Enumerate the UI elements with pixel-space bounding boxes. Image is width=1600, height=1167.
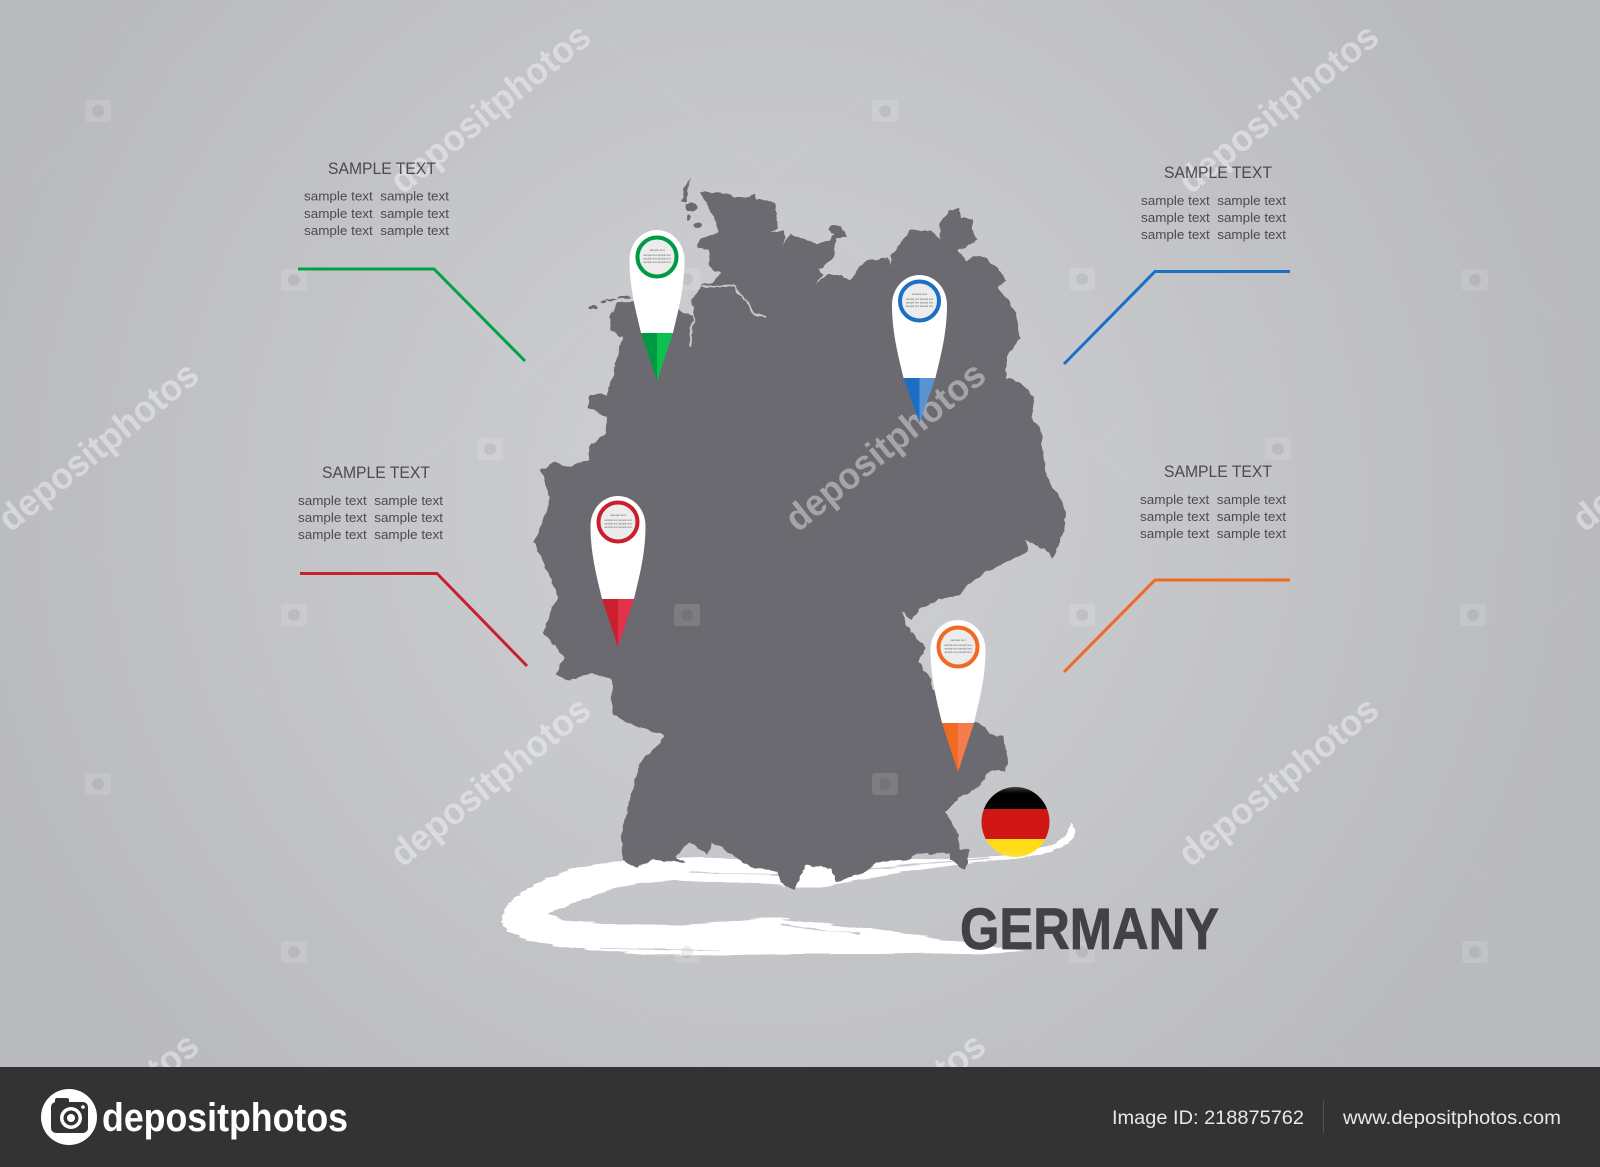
callout: top left (green): [304, 160, 449, 238]
callout: bottom right (orange): sample text sample text: [1140, 509, 1286, 524]
footer logo icon: [41, 1089, 97, 1145]
callout: bottom right (orange): sample text sample text: [1140, 526, 1286, 541]
leader line: orange: [1064, 580, 1290, 672]
footer bar: [0, 1067, 1600, 1167]
watermark text: depositphotos: [382, 688, 598, 874]
callout: top left (green): SAMPLE TEXT: [328, 160, 436, 178]
pin: blue: [892, 275, 947, 423]
callout: top left (green): sample text sample text: [304, 188, 449, 204]
callout: top left (green): sample text sample text: [304, 223, 449, 238]
pin: green: sample text sample text: [643, 260, 671, 264]
pin: blue: sample text sample text: [906, 300, 933, 304]
watermark text: depositphotos: [382, 15, 598, 201]
pin: blue: sample text sample text: [906, 304, 933, 308]
pin: orange: [930, 620, 986, 772]
watermark text: depositphotos: [1170, 15, 1386, 201]
pin: green: sample text: [649, 248, 665, 252]
pin: orange: sample text sample text: [944, 650, 972, 654]
leader line: red: [300, 574, 527, 666]
leader line: blue: [1064, 272, 1290, 364]
brush stroke: [502, 823, 1075, 955]
icon: germany flag badge: [980, 786, 1052, 859]
pin: orange: sample text sample text: [944, 646, 972, 650]
callout: bottom left (red): sample text sample text: [298, 493, 443, 508]
pin: green: [630, 230, 684, 381]
callout: top left (green): sample text sample text: [304, 206, 449, 221]
footer logo wordmark: depositphotos: [102, 1096, 348, 1140]
callout: bottom right (orange): [1140, 463, 1286, 541]
website url: www.depositphotos.com: [1342, 1108, 1561, 1129]
pin: red: sample text sample text: [604, 518, 632, 522]
callout: bottom left (red): [298, 464, 443, 542]
pin: green: sample text sample text: [643, 253, 671, 257]
pin: orange: sample text sample text: [944, 643, 972, 647]
watermark text: depositphotos: [777, 353, 993, 539]
image id: Image ID: 218875762: [1112, 1108, 1304, 1129]
callout: top right (blue): SAMPLE TEXT: [1164, 164, 1272, 182]
camera watermark icons: [85, 100, 1488, 963]
watermark text: depositphotos: [1170, 688, 1386, 874]
country name: GERMANY: [960, 897, 1219, 962]
pin: blue: sample text: [912, 292, 927, 296]
pin: orange: sample text: [950, 638, 966, 642]
callout: top right (blue): [1141, 164, 1286, 242]
pin: blue: sample text sample text: [906, 297, 933, 301]
callout: bottom right (orange): SAMPLE TEXT: [1164, 463, 1272, 481]
pin: red: sample text: [610, 513, 626, 517]
pin: red: [590, 496, 646, 647]
callout: bottom left (red): SAMPLE TEXT: [322, 464, 430, 482]
pin: red: sample text sample text: [604, 525, 632, 529]
callout: top right (blue): sample text sample text: [1141, 227, 1286, 242]
leader line: green: [298, 269, 525, 361]
callout: top right (blue): sample text sample text: [1141, 193, 1286, 208]
pin: red: sample text sample text: [604, 522, 632, 526]
callout: bottom right (orange): sample text sample text: [1140, 492, 1286, 507]
pin: green: sample text sample text: [643, 256, 671, 260]
callout: bottom left (red): sample text sample text: [298, 510, 443, 525]
callout: bottom left (red): sample text sample text: [298, 527, 443, 542]
germany map: [533, 177, 1066, 890]
callout: top right (blue): sample text sample text: [1141, 210, 1286, 225]
